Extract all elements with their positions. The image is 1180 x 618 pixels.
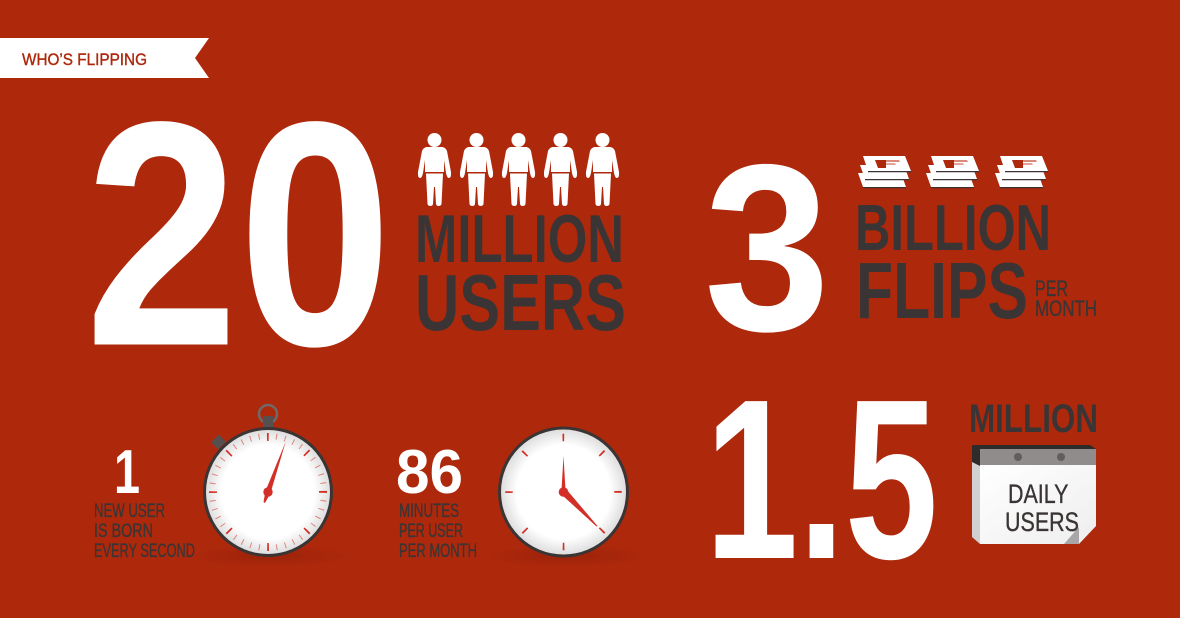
number: 1: 1 xyxy=(114,438,140,507)
label: per month: MONTH xyxy=(1035,296,1097,321)
text: new user is born every second: EVERY SECOND xyxy=(94,540,195,562)
number: 3: 3 xyxy=(704,116,830,381)
label: billion: BILLION xyxy=(855,191,1051,264)
banner: who's flipping xyxy=(0,38,209,78)
stat: 1.5 million daily users xyxy=(705,353,1098,607)
stat: 20 million users xyxy=(85,54,626,412)
stopwatch hand xyxy=(263,442,286,503)
clock ticks xyxy=(509,438,618,546)
label: million: MILLION xyxy=(969,397,1098,441)
stat: 1 new user per second xyxy=(94,438,195,562)
calendar text: USERS xyxy=(1005,507,1079,537)
icon: calendar xyxy=(972,445,1096,544)
text: new user is born every second: NEW USER xyxy=(94,500,165,522)
stat: 86 minutes per user per month xyxy=(396,438,477,562)
calendar text: DAILY xyxy=(1008,479,1068,509)
label: per month: PER xyxy=(1035,276,1068,301)
clock hands xyxy=(559,456,598,526)
banner: who's flipping: WHO’S FLIPPING xyxy=(22,50,147,69)
stopwatch minor ticks xyxy=(212,436,324,548)
text: new user is born every second: IS BORN xyxy=(94,520,153,542)
text: minutes per user per month: PER USER xyxy=(399,520,463,542)
icon: clock xyxy=(484,426,648,567)
text: minutes per user per month: MINUTES xyxy=(399,500,459,522)
number: 86: 86 xyxy=(396,438,463,507)
stopwatch major ticks xyxy=(213,437,323,547)
stat: 3 billion flips per month xyxy=(704,116,1097,381)
icon: stopwatch xyxy=(188,405,352,567)
text: minutes per user per month: PER MONTH xyxy=(399,540,477,562)
label: million: MILLION xyxy=(415,201,624,277)
number: 1.5: 1.5 xyxy=(705,353,938,607)
number: 20: 20 xyxy=(85,54,392,412)
icon: three flipboard stacks xyxy=(858,156,1048,188)
label: flips: FLIPS xyxy=(856,246,1028,335)
label: users: USERS xyxy=(415,258,626,347)
icon: five people xyxy=(418,133,619,206)
